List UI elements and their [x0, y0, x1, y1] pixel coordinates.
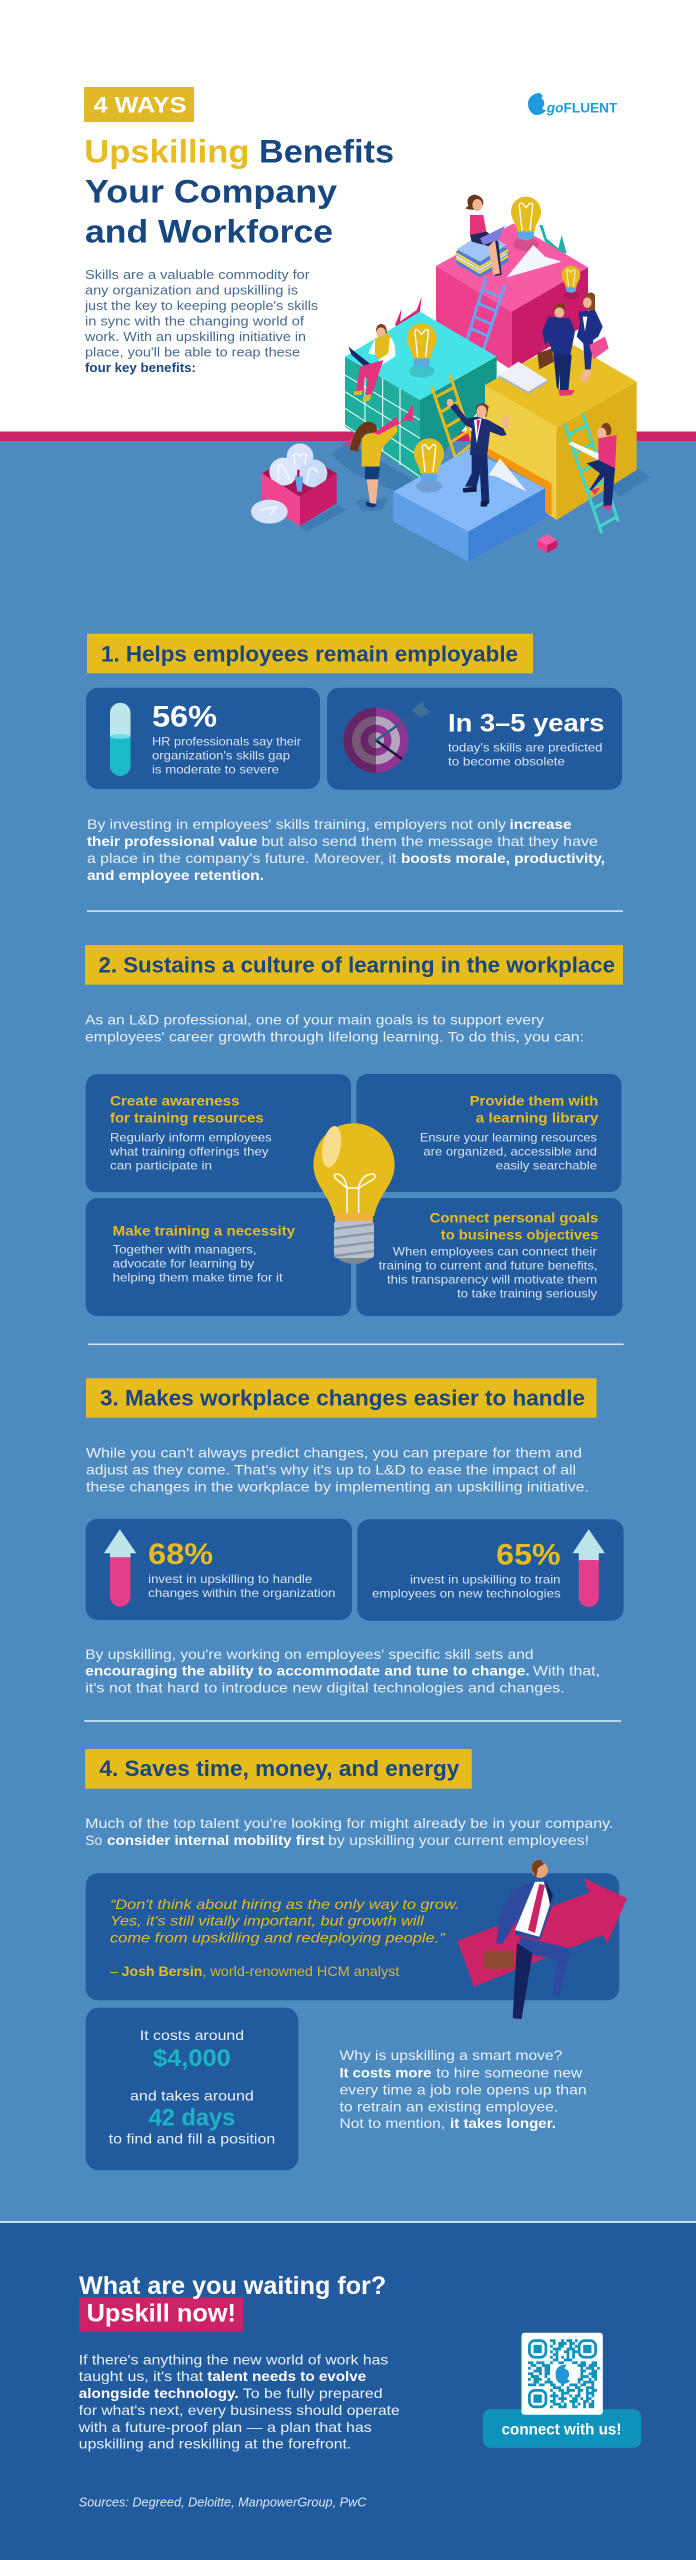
small pink cube — [537, 534, 557, 553]
panel: 65% stat: employees on new technologies — [372, 1587, 561, 1601]
section 1 paragraph: but also send them the message that they have — [261, 833, 598, 849]
section 1 paragraph: a place in the company's future. Moreover, it — [87, 850, 397, 866]
panel: connect personal goals — [356, 1198, 622, 1316]
pink ladder behind teal block — [395, 297, 422, 327]
icon: central light bulb — [313, 1123, 395, 1264]
intro text: in sync with the changing world of — [85, 314, 304, 328]
panel: 68% stat — [86, 1519, 352, 1620]
panel: cost figures: and takes around — [130, 2087, 254, 2103]
text: why upskilling is smart: Why is upskilling a smart move? — [340, 2047, 563, 2063]
intro text: four key benefits: — [85, 360, 196, 375]
icon: target with arrow — [344, 701, 431, 773]
woman on books — [465, 195, 505, 276]
logo: goFLUENT — [528, 93, 618, 116]
section 4 intro: by upskilling your current employees! — [328, 1832, 589, 1848]
panel: 68% stat: 68% — [148, 1538, 213, 1571]
books — [456, 233, 508, 277]
text: why upskilling is smart: to hire someone new — [436, 2064, 583, 2080]
blue block — [393, 448, 545, 562]
button: connect with us — [483, 2409, 641, 2448]
ground shadows — [300, 442, 650, 532]
man gesturing — [447, 399, 509, 507]
section 2 heading: 2. Sustains a culture of learning in the workplace — [98, 952, 615, 977]
section 2 intro: As an L&D professional, one of your main goals is to support every — [85, 1011, 544, 1027]
panel: learning library — [356, 1074, 621, 1192]
section 3 heading — [86, 1378, 596, 1418]
panel: cost figures — [86, 2008, 298, 2170]
footer paragraph: To be fully prepared — [243, 2385, 383, 2401]
section 3 intro: these changes in the workplace by implementing an upskilling initiative. — [86, 1478, 589, 1494]
section 1 paragraph: increase — [510, 816, 572, 832]
panel: 68% stat: invest in upskilling to handle — [148, 1572, 313, 1586]
panel: make training a necessity: Together with managers, — [113, 1242, 256, 1256]
footer heading: Upskill now! — [87, 2300, 236, 2328]
icon: gauge tube — [110, 703, 130, 776]
panel: quote: “Don't think about hiring as the only way to grow. — [110, 1896, 459, 1912]
panel: 56% stat: HR professionals say their — [152, 734, 301, 748]
section 1 paragraph: their professional value — [87, 833, 258, 849]
footer paragraph: taught us, it's that — [79, 2368, 203, 2384]
badge: 4 WAYS: 4 WAYS — [94, 92, 186, 118]
panel: learning library: Provide them with — [470, 1093, 598, 1109]
man climbing ladder — [568, 423, 617, 511]
icon: rising arrow tube — [573, 1529, 605, 1607]
section 2 heading — [85, 945, 623, 985]
QR code — [522, 2333, 603, 2415]
panel: quote: , world-renowned HCM analyst — [202, 1963, 400, 1979]
text: why upskilling is smart: to retrain an existing employee. — [340, 2098, 558, 2114]
button: connect with us: connect with us! — [502, 2421, 621, 2438]
couple: man and woman shaking hands — [537, 292, 609, 396]
section 1 paragraph — [87, 816, 605, 883]
panel: 65% stat: 65% — [496, 1539, 561, 1572]
panel: connect personal goals: Connect personal goals — [430, 1210, 599, 1226]
section 1 heading — [87, 634, 533, 673]
footer paragraph: for what's next, every business should operate — [79, 2402, 400, 2418]
text: why upskilling is smart — [340, 2047, 587, 2131]
panel: 65% stat — [357, 1519, 624, 1621]
crimson band — [0, 432, 696, 441]
section 1 paragraph: and employee retention. — [87, 867, 264, 883]
pink block — [436, 223, 588, 370]
section 4 heading: 4. Saves time, money, and energy — [99, 1756, 460, 1781]
paper plane lower — [488, 458, 527, 492]
open book — [498, 362, 548, 394]
page background: blue body — [0, 440, 696, 2224]
teal block with grid — [345, 312, 497, 480]
panel: create awareness: what training offerings they — [109, 1144, 268, 1158]
section 1 paragraph: boosts morale, productivity, — [401, 850, 605, 866]
panel: learning library: are organized, accessible and — [423, 1144, 597, 1158]
paper plane top — [507, 245, 562, 277]
yellow ladder — [432, 375, 474, 469]
footer heading — [79, 2272, 386, 2332]
title: Your Company — [85, 174, 337, 210]
panel: connect personal goals: to take training seriously — [457, 1287, 597, 1301]
blue ladder — [465, 277, 505, 355]
man on teal block with laptop — [348, 324, 395, 402]
text: why upskilling is smart: it takes longer. — [450, 2115, 556, 2131]
section 3 heading: 3. Makes workplace changes easier to handle — [100, 1385, 585, 1410]
illustration: isometric blocks and people — [251, 195, 650, 562]
section 1 paragraph: By investing in employees' skills training, employers not only — [87, 816, 506, 832]
text: why upskilling is smart: Not to mention, — [340, 2115, 445, 2131]
pink box with pale bulbs — [251, 443, 337, 526]
panel: quote: Yes, it's still vitally important, but growth will — [110, 1913, 425, 1929]
text: why upskilling is smart: every time a job role opens up than — [340, 2081, 587, 2097]
panel: learning library: Ensure your learning resources — [420, 1130, 597, 1144]
panel: make training a necessity: advocate for learning by — [113, 1256, 254, 1270]
section 3 paragraph: With that, — [533, 1663, 600, 1679]
illustration: businessman carrying arrow — [457, 1860, 627, 2019]
section 4 intro — [85, 1815, 613, 1848]
panel: 56% stat: organization's skills gap — [152, 748, 290, 762]
section 4 intro: So — [85, 1832, 102, 1848]
footer paragraph: If there's anything the new world of work has — [79, 2351, 388, 2367]
intro text — [84, 267, 318, 375]
section 3 intro: While you can't always predict changes, you can prepare for them and — [86, 1444, 582, 1460]
title: Upskilling — [84, 134, 250, 170]
sources: Sources: Degreed, Deloitte, ManpowerGroup, PwC — [79, 2496, 367, 2510]
panel: cost figures: It costs around — [140, 2027, 244, 2043]
panel: create awareness: can participate in — [110, 1158, 212, 1172]
footer paragraph: talent needs to evolve — [207, 2368, 366, 2384]
panel: create awareness: Regularly inform employees — [110, 1130, 272, 1144]
footer background — [0, 2222, 696, 2560]
footer paragraph: alongside technology. — [79, 2385, 239, 2401]
title — [84, 134, 394, 250]
intro text: any organization and upskilling is — [85, 282, 298, 298]
section 3 paragraph: encouraging the ability to accommodate and tune to change. — [85, 1663, 530, 1679]
panel: quote: Josh Bersin — [122, 1963, 202, 1979]
section 3 paragraph — [85, 1646, 600, 1696]
intro text: just the key to keeping people's skills — [84, 298, 318, 313]
panel: 56% stat — [86, 688, 320, 789]
panel: 3-5 years stat — [327, 688, 622, 790]
panel: 56% stat: is moderate to severe — [152, 762, 279, 776]
panel: connect personal goals: training to current and future benefits, — [379, 1259, 598, 1273]
panel: make training a necessity: Make training a necessity — [113, 1222, 295, 1238]
section 4 intro: consider internal mobility first — [107, 1832, 325, 1848]
intro text: Skills are a valuable commodity for — [85, 267, 310, 282]
title: and Workforce — [85, 214, 333, 250]
panel: learning library: easily searchable — [496, 1158, 597, 1172]
panel: cost figures: $4,000 — [153, 2045, 231, 2072]
panel: create awareness: for training resources — [110, 1110, 264, 1126]
section 4 intro: Much of the top talent you're looking for might already be in your company. — [85, 1815, 613, 1831]
panel: make training a necessity — [86, 1198, 351, 1316]
section 3 paragraph: By upskilling, you're working on employees' specific skill sets and — [85, 1646, 534, 1662]
section 4 heading — [85, 1749, 472, 1789]
footer paragraph: upskilling and reskilling at the forefront. — [79, 2436, 351, 2452]
panel: 3-5 years stat: In 3–5 years — [448, 710, 604, 738]
panel: 65% stat: invest in upskilling to train — [410, 1573, 560, 1587]
section 3 intro — [86, 1444, 589, 1494]
panel: cost figures: 42 days — [149, 2105, 235, 2132]
panel: 3-5 years stat: today's skills are predicted — [448, 741, 602, 755]
panel: quote — [86, 1873, 619, 2000]
woman with chart arrow — [345, 403, 413, 508]
panel: create awareness — [86, 1074, 351, 1192]
panel: quote: – — [110, 1963, 118, 1979]
icon: rising arrow tube — [104, 1529, 136, 1607]
panel: connect personal goals: this transparency will motivate them — [387, 1273, 597, 1287]
panel: create awareness: Create awareness — [110, 1093, 240, 1109]
panel: connect personal goals: to business objectives — [441, 1226, 599, 1242]
footer paragraph — [78, 2351, 400, 2452]
logo: goFLUENT: goFLUENT — [546, 100, 618, 116]
teal ladder behind pink block — [539, 225, 567, 253]
intro text: work. With an upskilling initiative in — [84, 329, 306, 344]
panel: connect personal goals: When employees can connect their — [393, 1245, 597, 1259]
section 2 intro — [85, 1011, 584, 1044]
section 3 paragraph: it's not that hard to introduce new digital technologies and changes. — [85, 1680, 565, 1696]
panel: cost figures: to find and fill a position — [109, 2131, 275, 2147]
section 1 heading: 1. Helps employees remain employable — [101, 642, 518, 667]
intro text: place, you'll be able to reap these — [85, 344, 300, 360]
panel: quote: come from upskilling and redeploying people.” — [110, 1930, 446, 1946]
orange ladder shadow and teal ladder — [564, 413, 618, 533]
footer paragraph: with a future-proof plan — a plan that has — [78, 2419, 372, 2435]
bulbs — [511, 197, 541, 251]
panel: learning library: a learning library — [476, 1110, 599, 1126]
panel: 68% stat: changes within the organization — [148, 1586, 336, 1600]
panel: 56% stat: 56% — [152, 701, 217, 734]
panel: 3-5 years stat: to become obsolete — [448, 754, 565, 768]
yellow block — [485, 340, 637, 520]
footer heading: What are you waiting for? — [79, 2272, 386, 2300]
text: why upskilling is smart: It costs more — [340, 2064, 432, 2080]
panel: make training a necessity: helping them make time for it — [113, 1270, 283, 1284]
section 2 intro: employees' career growth through lifelong learning. To do this, you can: — [85, 1028, 584, 1044]
title: Benefits — [259, 134, 394, 170]
section 3 intro: adjust as they come. That's why it's up to L&D to ease the impact of all — [86, 1461, 576, 1477]
badge: 4 WAYS — [84, 87, 194, 122]
